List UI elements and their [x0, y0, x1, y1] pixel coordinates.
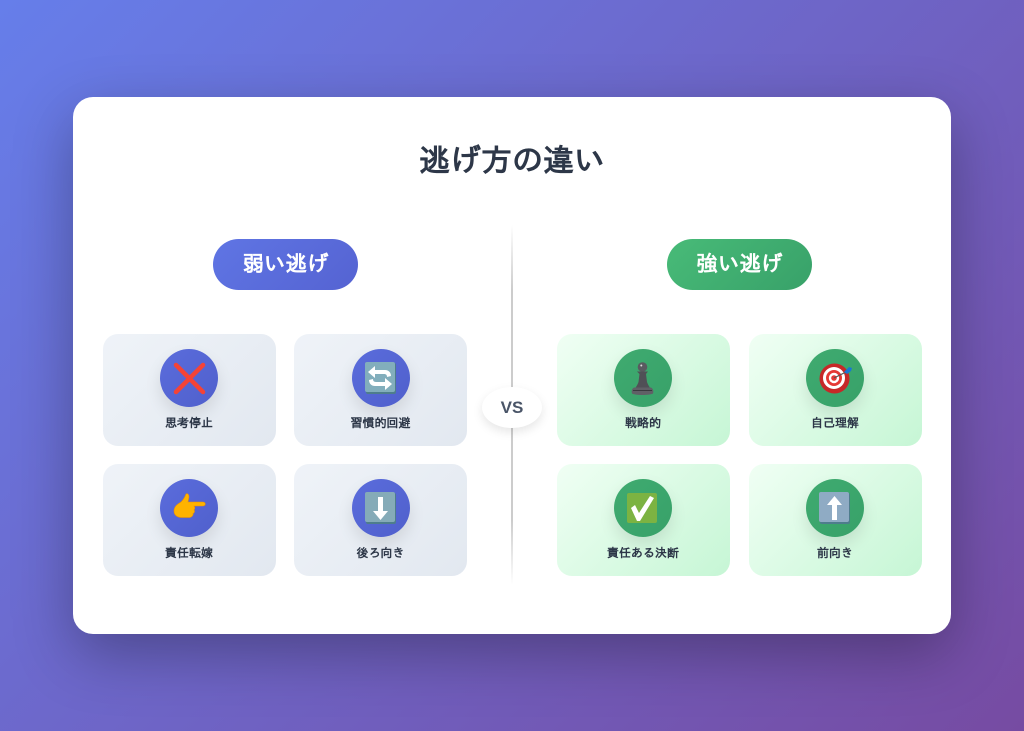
item: responsible decision	[556, 464, 730, 576]
icon: down arrow	[352, 479, 410, 537]
heading: strong escape	[667, 239, 812, 290]
label: 戦略的	[625, 416, 661, 430]
heading: strong escape: 強い逃げ	[696, 252, 782, 276]
item: strategic	[556, 334, 730, 446]
item: thinking stopped	[102, 334, 276, 446]
label: 責任転嫁	[165, 546, 213, 560]
VS badge: VS	[501, 398, 523, 417]
icon: pointing hand	[160, 479, 218, 537]
item: habitual avoidance	[294, 334, 467, 446]
item: forward looking	[748, 464, 922, 576]
label: 責任ある決断	[607, 546, 679, 560]
heading: weak escape: 弱い逃げ	[242, 252, 328, 276]
icon: up arrow	[806, 479, 864, 537]
label: 習慣的回避	[350, 416, 410, 430]
label: 思考停止	[165, 416, 213, 430]
icon: repeat arrows	[352, 349, 410, 407]
label: 前向き	[817, 546, 853, 560]
label: 後ろ向き	[356, 546, 404, 560]
icon: dart target	[806, 349, 864, 407]
VS badge	[482, 387, 542, 428]
panel: main card	[73, 97, 951, 634]
icon: chess pawn	[614, 349, 672, 407]
title: 逃げ方の違い	[419, 143, 605, 178]
item: self understanding	[748, 334, 922, 446]
item: backward looking	[294, 464, 467, 576]
icon: red cross	[160, 349, 218, 407]
heading: weak escape	[213, 239, 358, 290]
label: 自己理解	[811, 416, 859, 430]
icon: check mark	[614, 479, 672, 537]
item: shifting responsibility	[102, 464, 276, 576]
center divider line	[511, 225, 513, 585]
